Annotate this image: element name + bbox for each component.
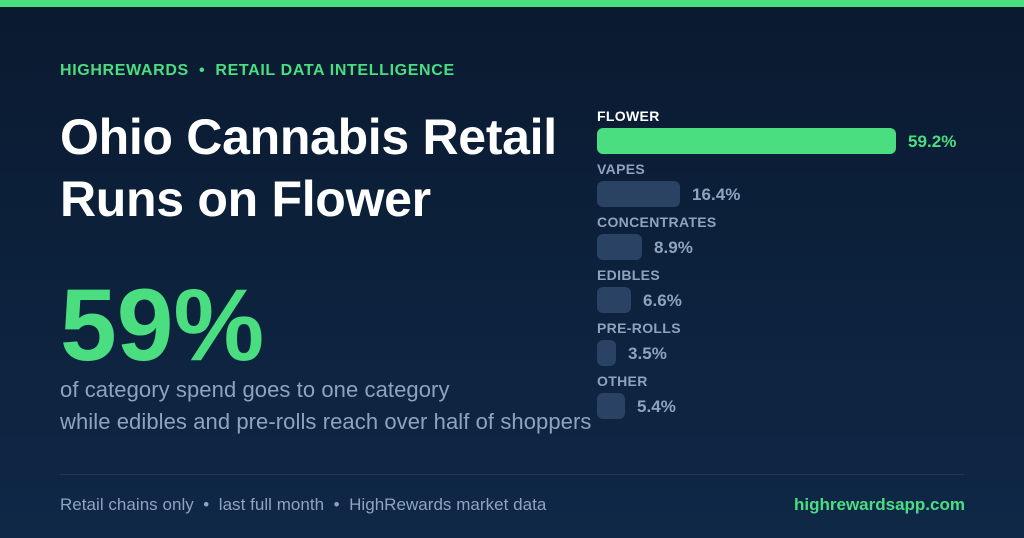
label: edibles: EDIBLES [597, 267, 660, 283]
bar: vapes [597, 181, 680, 207]
bar: other [597, 393, 625, 419]
value: pre-rolls: 3.5% [628, 344, 667, 363]
top accent bar [0, 0, 1024, 7]
value: other: 5.4% [637, 397, 676, 416]
value: vapes: 16.4% [692, 185, 740, 204]
value: flower: 59.2% [908, 132, 956, 151]
bar chart [597, 107, 967, 420]
label: other: OTHER [597, 373, 648, 389]
title [60, 109, 557, 226]
label: vapes: VAPES [597, 161, 645, 177]
stat description [60, 377, 591, 434]
footer url: highrewardsapp.com [794, 495, 965, 514]
eyebrow heading: HIGHREWARDS • RETAIL DATA INTELLIGENCE [60, 62, 455, 79]
label: pre-rolls: PRE-ROLLS [597, 320, 681, 336]
footer source note: Retail chains only • last full month • HighRewards market data [60, 495, 546, 514]
title: Runs on Flower [60, 170, 431, 226]
value: edibles: 6.6% [643, 291, 682, 310]
bar: flower [597, 128, 896, 154]
big stat: 59% [60, 268, 264, 382]
stat description: while edibles and pre-rolls reach over half of shoppers [60, 409, 591, 434]
label: concentrates: CONCENTRATES [597, 214, 717, 230]
bar: concentrates [597, 234, 642, 260]
bar: edibles [597, 287, 631, 313]
title: Ohio Cannabis Retail [60, 109, 557, 165]
footer divider [60, 474, 964, 475]
value: concentrates: 8.9% [654, 238, 693, 257]
label: flower: FLOWER [597, 108, 660, 124]
stat description: of category spend goes to one category [60, 377, 450, 402]
bar: pre-rolls [597, 340, 616, 366]
